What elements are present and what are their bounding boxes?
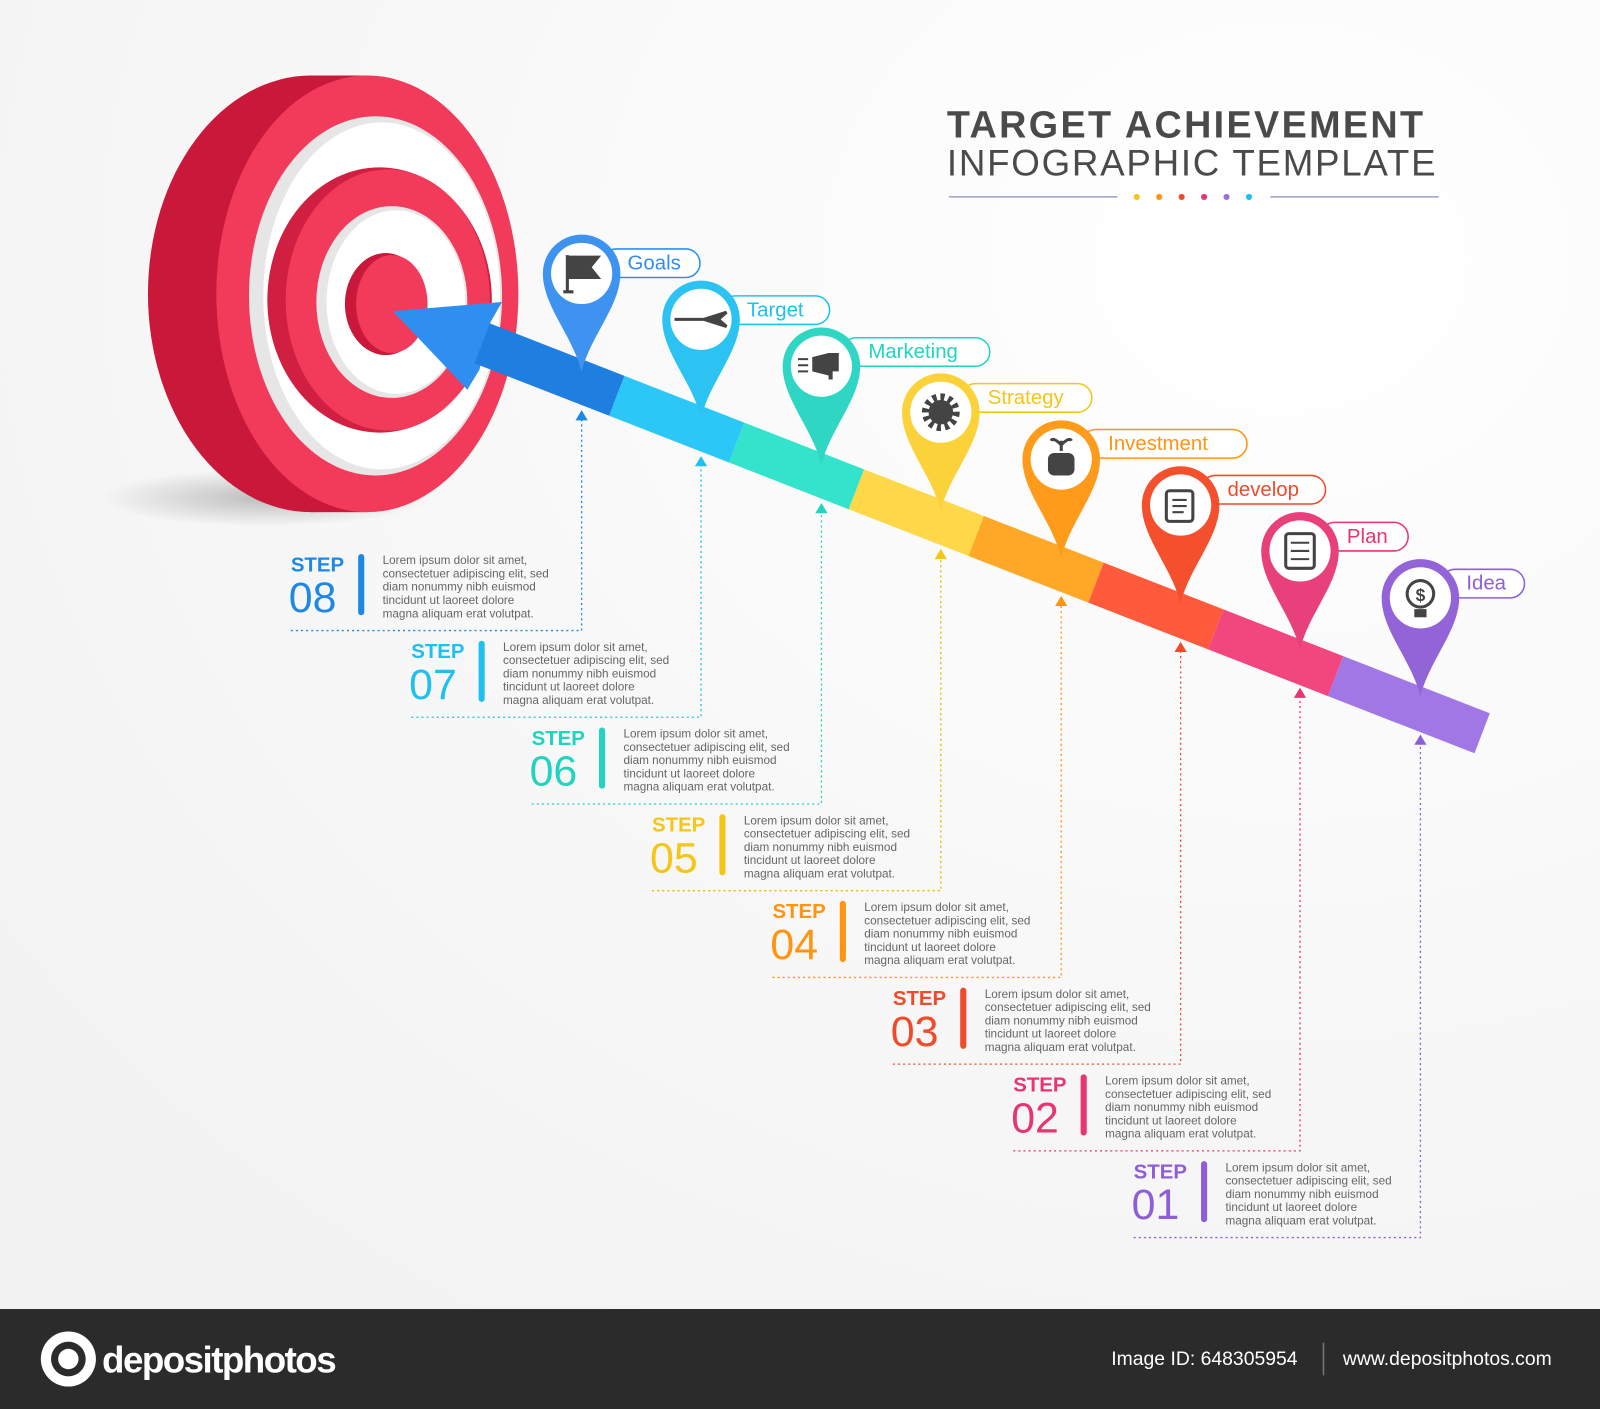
step 04: magna aliquam erat volutpat. bbox=[864, 954, 1015, 967]
pin: Idea: $ bbox=[1416, 585, 1426, 605]
step 08: consectetuer adipiscing elit, sed bbox=[383, 567, 549, 580]
footer bar: www.depositphotos.com bbox=[1342, 1348, 1552, 1370]
step 06: diam nonummy nibh euismod bbox=[623, 754, 777, 767]
step 03: consectetuer adipiscing elit, sed bbox=[985, 1001, 1151, 1014]
step 04: STEP bbox=[772, 901, 826, 923]
step 02: STEP bbox=[1013, 1075, 1067, 1097]
step 02: Lorem ipsum dolor sit amet, bbox=[1105, 1075, 1250, 1088]
step 07 bbox=[409, 641, 669, 709]
step 08: 08 bbox=[289, 574, 336, 622]
target bbox=[102, 76, 518, 526]
step 06: Lorem ipsum dolor sit amet, bbox=[623, 728, 768, 741]
title: INFOGRAPHIC TEMPLATE bbox=[947, 142, 1437, 183]
step 08: Lorem ipsum dolor sit amet, bbox=[383, 554, 527, 567]
title bbox=[947, 104, 1439, 200]
pin: Strategy bbox=[902, 373, 1092, 511]
step 03 bbox=[891, 988, 1151, 1056]
step 06: consectetuer adipiscing elit, sed bbox=[623, 741, 790, 754]
step 05: 05 bbox=[650, 834, 698, 882]
pin: Investment bbox=[1022, 420, 1247, 558]
step 03: diam nonummy nibh euismod bbox=[985, 1014, 1138, 1027]
step 05: consectetuer adipiscing elit, sed bbox=[744, 828, 910, 841]
pin: Marketing bbox=[783, 328, 990, 465]
step 08: diam nonummy nibh euismod bbox=[383, 581, 536, 594]
step 06: STEP bbox=[532, 728, 585, 750]
step 07: Lorem ipsum dolor sit amet, bbox=[503, 641, 648, 654]
step 03: tincidunt ut laoreet dolore bbox=[985, 1028, 1116, 1041]
pin: Investment: Investment bbox=[1108, 433, 1208, 455]
step 05: STEP bbox=[652, 815, 705, 837]
pin: Plan bbox=[1261, 512, 1408, 650]
step 08 bbox=[289, 554, 549, 622]
step 06 bbox=[530, 727, 790, 796]
step 07: magna aliquam erat volutpat. bbox=[503, 694, 654, 707]
step 04: Lorem ipsum dolor sit amet, bbox=[864, 901, 1009, 914]
pin: Idea: Idea bbox=[1466, 573, 1507, 595]
pin: Plan: Plan bbox=[1347, 526, 1388, 548]
step 08: STEP bbox=[291, 554, 344, 576]
step 06: 06 bbox=[530, 748, 577, 796]
footer bar bbox=[0, 1309, 1600, 1409]
pin: Goals bbox=[543, 235, 700, 372]
footer bar: Image ID: 648305954 bbox=[1111, 1348, 1298, 1370]
step 06: magna aliquam erat volutpat. bbox=[623, 781, 775, 794]
step 04: 04 bbox=[770, 921, 818, 969]
step 04: diam nonummy nibh euismod bbox=[864, 928, 1017, 941]
step 01: consectetuer adipiscing elit, sed bbox=[1226, 1175, 1392, 1188]
step 04 bbox=[770, 901, 1030, 969]
arrow band bbox=[393, 302, 1490, 753]
pin: Target bbox=[662, 281, 830, 418]
step 07: diam nonummy nibh euismod bbox=[503, 667, 656, 680]
pin: develop: develop bbox=[1228, 479, 1299, 501]
step 03: magna aliquam erat volutpat. bbox=[985, 1041, 1136, 1054]
pin: Strategy: Strategy bbox=[988, 387, 1065, 409]
step 02: magna aliquam erat volutpat. bbox=[1105, 1128, 1256, 1141]
pin: develop bbox=[1142, 466, 1326, 604]
step 05 bbox=[650, 814, 910, 882]
step 01 bbox=[1132, 1161, 1392, 1229]
step 01: tincidunt ut laoreet dolore bbox=[1226, 1201, 1357, 1214]
step 03: STEP bbox=[893, 988, 946, 1010]
step 07: tincidunt ut laoreet dolore bbox=[503, 681, 635, 694]
step 07: consectetuer adipiscing elit, sed bbox=[503, 654, 669, 667]
connector lines bbox=[291, 418, 1420, 1238]
step 05: magna aliquam erat volutpat. bbox=[744, 867, 895, 880]
step 05: diam nonummy nibh euismod bbox=[744, 841, 897, 854]
step 07: STEP bbox=[411, 641, 464, 663]
step 02: tincidunt ut laoreet dolore bbox=[1105, 1114, 1237, 1127]
step 01: STEP bbox=[1134, 1161, 1187, 1183]
step 02 bbox=[1011, 1074, 1271, 1143]
step 03: 03 bbox=[891, 1008, 938, 1056]
footer bar: depositphotos bbox=[102, 1339, 335, 1380]
step 01: diam nonummy nibh euismod bbox=[1226, 1188, 1379, 1201]
step 04: tincidunt ut laoreet dolore bbox=[864, 941, 996, 954]
step 08: magna aliquam erat volutpat. bbox=[383, 607, 534, 620]
step 01: magna aliquam erat volutpat. bbox=[1226, 1214, 1377, 1227]
step 01: Lorem ipsum dolor sit amet, bbox=[1226, 1161, 1370, 1174]
pin: Idea bbox=[1382, 559, 1524, 697]
step 05: Lorem ipsum dolor sit amet, bbox=[744, 814, 888, 827]
pin: Goals: Goals bbox=[628, 252, 681, 274]
step 03: Lorem ipsum dolor sit amet, bbox=[985, 988, 1129, 1001]
step 04: consectetuer adipiscing elit, sed bbox=[864, 914, 1030, 927]
step 07: 07 bbox=[409, 661, 457, 709]
step 01: 01 bbox=[1132, 1181, 1179, 1229]
step 05: tincidunt ut laoreet dolore bbox=[744, 854, 875, 867]
step 08: tincidunt ut laoreet dolore bbox=[383, 594, 514, 607]
pin: Marketing: Marketing bbox=[868, 341, 958, 363]
pin: Target: Target bbox=[747, 299, 804, 321]
title: TARGET ACHIEVEMENT bbox=[947, 104, 1425, 146]
step 06: tincidunt ut laoreet dolore bbox=[623, 767, 755, 780]
step 02: 02 bbox=[1011, 1095, 1059, 1143]
connector arrowheads bbox=[576, 410, 1427, 745]
step 02: diam nonummy nibh euismod bbox=[1105, 1101, 1258, 1114]
step 02: consectetuer adipiscing elit, sed bbox=[1105, 1088, 1271, 1101]
